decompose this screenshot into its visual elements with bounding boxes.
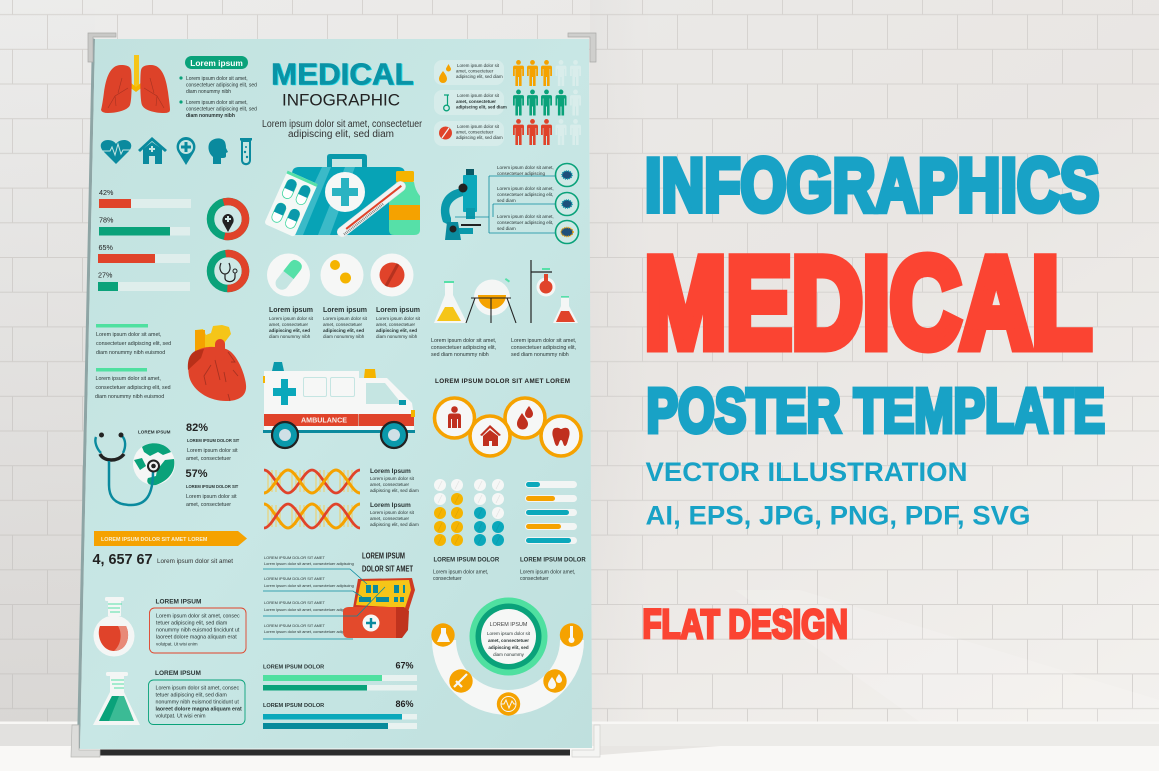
semicircle diagram: LOREM IPSUM [490, 622, 528, 628]
double bar chart: LOREM IPSUM DOLOR [263, 703, 324, 709]
pill grid captions: consectetuer [433, 576, 462, 582]
subheading: vector illustration: VECTOR ILLUSTRATION [646, 457, 968, 487]
pill circles row [267, 254, 414, 296]
green text box [148, 670, 245, 724]
medical case callouts: Lorem ipsum dolor sit amet, consectetuer adipiscing [264, 629, 354, 634]
heart text blocks: diam nonummy nibh euismod [96, 350, 165, 356]
medical case callouts [264, 552, 413, 634]
progress bars left: 78% [99, 216, 114, 224]
pill captions: amet, consectetuer [323, 322, 363, 327]
red text box: tetuer adipiscing elit, sed diam [156, 620, 228, 626]
pill captions: adipiscing elit, sed [323, 328, 364, 333]
pill captions: Lorem ipsum [323, 307, 367, 314]
icon: droplets [517, 406, 533, 430]
heart text blocks: diam nonummy nibh euismod [95, 394, 164, 400]
stat panels top right: Lorem ipsum dolor sit [457, 124, 500, 129]
double bar chart: 67% [396, 660, 414, 670]
round flask illustration [94, 597, 134, 656]
medicine bottle [389, 171, 420, 235]
stethoscope statistics: Lorem ipsum dolor sit [187, 448, 238, 454]
pill captions: diam nonummy nibh [376, 334, 418, 339]
icon: location pin [177, 137, 195, 165]
pill grid captions [433, 558, 586, 582]
lungs callout: diam nonummy nibh [186, 113, 235, 119]
orange banner [94, 531, 247, 546]
pill captions: amet, consectetuer [269, 322, 309, 327]
semicircle diagram [431, 598, 584, 716]
stethoscope and globe illustration [95, 432, 175, 505]
baseboard and floor [0, 722, 1159, 771]
icon: hospital house [138, 137, 167, 164]
donut chart: stethoscope [208, 251, 248, 291]
stethoscope statistics: amet, consectetuer [186, 502, 231, 508]
medical case callouts: LOREM IPSUM DOLOR SIT AMET [264, 555, 326, 560]
stethoscope statistics: 82% [186, 422, 208, 434]
lungs callout: Lorem ipsum dolor sit amet, [186, 100, 248, 106]
microscope callouts: sed diam [497, 198, 516, 203]
pill dot grid [434, 479, 504, 546]
stethoscope statistics: LOREM IPSUM DOLOR SIT [186, 484, 239, 489]
pill grid captions: LOREM IPSUM DOLOR [434, 558, 500, 564]
small progress bars [525, 481, 577, 544]
pill captions: Lorem ipsum [376, 307, 420, 314]
stethoscope statistics: amet, consectetuer [186, 456, 231, 462]
heart text blocks: consectetuer adipiscing elit, sed [96, 341, 171, 347]
title [262, 57, 423, 140]
headline: poster template: POSTER TEMPLATE [646, 376, 1105, 445]
stat panels top right: Lorem ipsum dolor sit [457, 93, 500, 98]
title: INFOGRAPHIC [282, 90, 400, 110]
DNA captions: Lorem Ipsum [370, 502, 411, 509]
stat panels top right: Lorem ipsum dolor sit [457, 63, 500, 68]
DNA captions [370, 468, 419, 527]
icon: head profile [208, 138, 228, 164]
green text box: tetuer adipiscing elit, sed diam [156, 692, 227, 698]
big number [92, 552, 233, 568]
stat panels top right: amet, consectetuer [456, 68, 494, 74]
microscope callouts: consectetuer adipiscing [497, 171, 545, 176]
semicircle diagram: adipiscing elit, sed [488, 645, 529, 650]
stat panels top right: amet, consectetuer [456, 99, 496, 104]
icon: thermometer white [568, 626, 574, 643]
red text box: Lorem ipsum dolor sit amet, consec [156, 614, 240, 620]
medical case callouts: LOREM IPSUM DOLOR SIT AMET [264, 623, 326, 628]
orange ring icons: LOREM IPSUM DOLOR SIT AMET LOREM [435, 378, 570, 385]
blister pack [264, 171, 318, 237]
lab flasks illustration [434, 260, 578, 323]
icon: tooth [552, 428, 570, 446]
stat panels top right: adipiscing elit, sed diam [456, 135, 503, 140]
ambulance illustration: AMBULANCE [301, 418, 347, 424]
people pictogram chart [513, 60, 581, 145]
pill captions: adipiscing elit, sed [269, 328, 310, 333]
ambulance illustration [263, 362, 415, 448]
big number: 4, 657 67 [92, 552, 152, 568]
microscope illustration [441, 169, 481, 240]
lungs illustration [101, 55, 170, 113]
pill captions: diam nonummy nibh [269, 334, 311, 339]
headline: infographics: INFOGRAPHICS [645, 144, 1099, 228]
medical case callouts: DOLOR SIT AMET [362, 564, 413, 574]
red text box: volutpat. Ut wisi enim [156, 642, 198, 646]
red text box: nonummy nibh euismod tincidunt ut [156, 628, 240, 634]
stethoscope statistics: LOREM IPSUM [138, 430, 171, 434]
thermometer [335, 179, 408, 239]
lab captions: Lorem ipsum dolor sit amet, [431, 338, 496, 344]
lungs callout: consectetuer adipiscing elit, sed [186, 106, 257, 112]
semicircle diagram: diam nonummy [493, 652, 525, 657]
progress bars left [98, 188, 191, 291]
stat panels top right: adipiscing elit, sed diam [456, 74, 503, 79]
microscope callouts: Lorem ipsum dolor sit amet, [497, 165, 554, 170]
icon: heart [100, 140, 132, 164]
pill captions: Lorem ipsum [269, 307, 313, 314]
icon: flask [437, 628, 450, 642]
red text box: laoreet dolore magna aliquam erat [156, 634, 237, 640]
DNA captions: Lorem ipsum dolor sit [370, 476, 415, 481]
icon: yellow pills [320, 254, 364, 296]
green text box: nonummy nibh euismod tincidunt ut [156, 700, 239, 706]
lab captions: Lorem ipsum dolor sit amet, [511, 338, 576, 344]
title: MEDICAL [271, 57, 414, 91]
heart text blocks: Lorem ipsum dolor sit amet, [96, 332, 161, 338]
microscope callouts: Lorem ipsum dolor sit amet, [497, 214, 554, 219]
heart text blocks: consectetuer adipiscing elit, sed [96, 385, 171, 391]
semicircle diagram: amet, consectetuer [488, 638, 529, 643]
poster board [71, 33, 600, 757]
lab captions: sed diam nonummy nibh [511, 352, 569, 358]
big number: Lorem ipsum dolor sit amet [157, 558, 233, 565]
headline: medical: MEDICAL [644, 233, 1092, 375]
semicircle diagram: Lorem ipsum dolor sit [487, 631, 531, 636]
lab captions: sed diam nonummy nibh [431, 352, 489, 358]
lungs callout [179, 56, 257, 119]
pill grid captions: consectetuer [520, 576, 549, 582]
red text box: LOREM IPSUM [156, 598, 201, 606]
lungs callout: Lorem ipsum dolor sit amet, [186, 76, 248, 82]
pill captions: adipiscing elit, sed [376, 328, 417, 333]
red text box [150, 598, 246, 653]
title: MEDICAL [272, 57, 415, 92]
DNA captions: amet, consectetuer [370, 516, 410, 521]
DNA captions: adipiscing elit, sed diam [370, 522, 419, 527]
icon: person [448, 406, 461, 428]
green text box: LOREM IPSUM [155, 670, 201, 677]
medical case callouts: LOREM IPSUM DOLOR SIT AMET [264, 576, 326, 581]
stethoscope statistics: LOREM IPSUM DOLOR SIT [187, 438, 240, 443]
medical case callouts: LOREM IPSUM DOLOR SIT AMET [264, 600, 326, 605]
subheading: file formats: AI, EPS, JPG, PNG, PDF, SVG [646, 500, 1030, 530]
title: adipiscing elit, sed diam [288, 129, 394, 140]
DNA captions: amet, consectetuer [370, 482, 410, 487]
stethoscope statistics: 57% [186, 468, 208, 480]
orange ring icons [434, 378, 581, 456]
pill captions: Lorem ipsum dolor sit [323, 316, 368, 321]
microscope callouts: sed diam [497, 226, 516, 231]
pill grid captions: Lorem ipsum dolor amet, [520, 570, 575, 576]
progress bars left: 65% [98, 243, 113, 252]
heart text blocks [95, 324, 171, 400]
donut chart: location [207, 198, 249, 240]
microscope callouts: consectetuer adipiscing elit, [497, 192, 553, 197]
DNA captions: Lorem ipsum dolor sit [370, 510, 415, 515]
stat panels top right [434, 60, 507, 146]
stethoscope statistics: Lorem ipsum dolor sit [186, 494, 237, 500]
medical case callouts: Lorem ipsum dolor sit amet, consectetuer adipiscing [264, 561, 354, 566]
stat panels top right: adipiscing elit, sed diam [456, 104, 507, 110]
pill grid captions: LOREM IPSUM DOLOR [520, 558, 586, 564]
pill grid captions: Lorem ipsum dolor amet, [433, 570, 488, 576]
title: Lorem ipsum dolor sit amet, consectetuer [262, 119, 423, 130]
microscope callouts: Lorem ipsum dolor sit amet, [497, 186, 554, 191]
lab captions [431, 338, 576, 358]
stat panels top right: amet, consectetuer [456, 130, 494, 134]
double bar chart: 86% [396, 699, 414, 709]
icon: syringe [454, 674, 467, 687]
pill captions: amet, consectetuer [376, 322, 416, 327]
icon: red tablet [370, 254, 414, 296]
green text box: laoreet dolore magna aliquam erat [156, 706, 242, 712]
icon: capsule [267, 254, 310, 296]
medical case callouts: Lorem ipsum dolor sit amet, consectetuer adipiscing [264, 607, 354, 612]
DNA helix illustration [264, 470, 360, 528]
medical case callouts: LOREM IPSUM [362, 552, 405, 560]
microscope callouts [455, 165, 555, 233]
heart text blocks: Lorem ipsum dolor sit amet, [96, 376, 161, 382]
progress bars left: 42% [99, 188, 114, 197]
anatomical heart illustration [188, 325, 246, 401]
icon: droplets white [548, 674, 562, 689]
conical flask illustration [93, 672, 140, 725]
icon: test tube [240, 138, 252, 165]
double bar chart: LOREM IPSUM DOLOR [263, 664, 324, 670]
first aid kit illustration [264, 154, 420, 239]
lab captions: consectetuer adipiscing elit, [511, 345, 576, 351]
pill captions: Lorem ipsum dolor sit [376, 316, 421, 321]
icon: hospital [480, 425, 501, 446]
medical case illustration [263, 569, 415, 639]
lungs callout: Lorem ipsum [190, 58, 243, 68]
green text box: volutpat. Ut wisi enim [156, 714, 206, 720]
icon row [100, 137, 252, 165]
double bar chart [263, 660, 417, 729]
bacteria icons [556, 164, 578, 244]
orange banner: LOREM IPSUM DOLOR SIT AMET LOREM [101, 537, 208, 543]
lab captions: consectetuer adipiscing elit, [431, 345, 496, 351]
pill captions: Lorem ipsum dolor sit [269, 316, 314, 321]
stethoscope statistics [138, 422, 240, 508]
lungs callout: diam nonummy nibh [186, 89, 231, 95]
lungs callout: consectetuer adipiscing elit, sed [186, 82, 257, 88]
pill captions: diam nonummy nibh [323, 334, 365, 339]
label: flat design: FLAT DESIGN [642, 601, 848, 647]
progress bars left: 27% [98, 270, 113, 280]
DNA captions: Lorem Ipsum [370, 468, 411, 475]
medical case callouts: Lorem ipsum dolor sit amet, consectetuer adipiscing [264, 583, 354, 588]
DNA captions: adipiscing elit, sed diam [370, 488, 419, 493]
pill captions [269, 307, 421, 339]
green text box: Lorem ipsum dolor sit amet, consec [156, 686, 239, 692]
microscope callouts: consectetuer adipiscing elit, [497, 220, 553, 225]
icon: pulse [501, 696, 516, 712]
